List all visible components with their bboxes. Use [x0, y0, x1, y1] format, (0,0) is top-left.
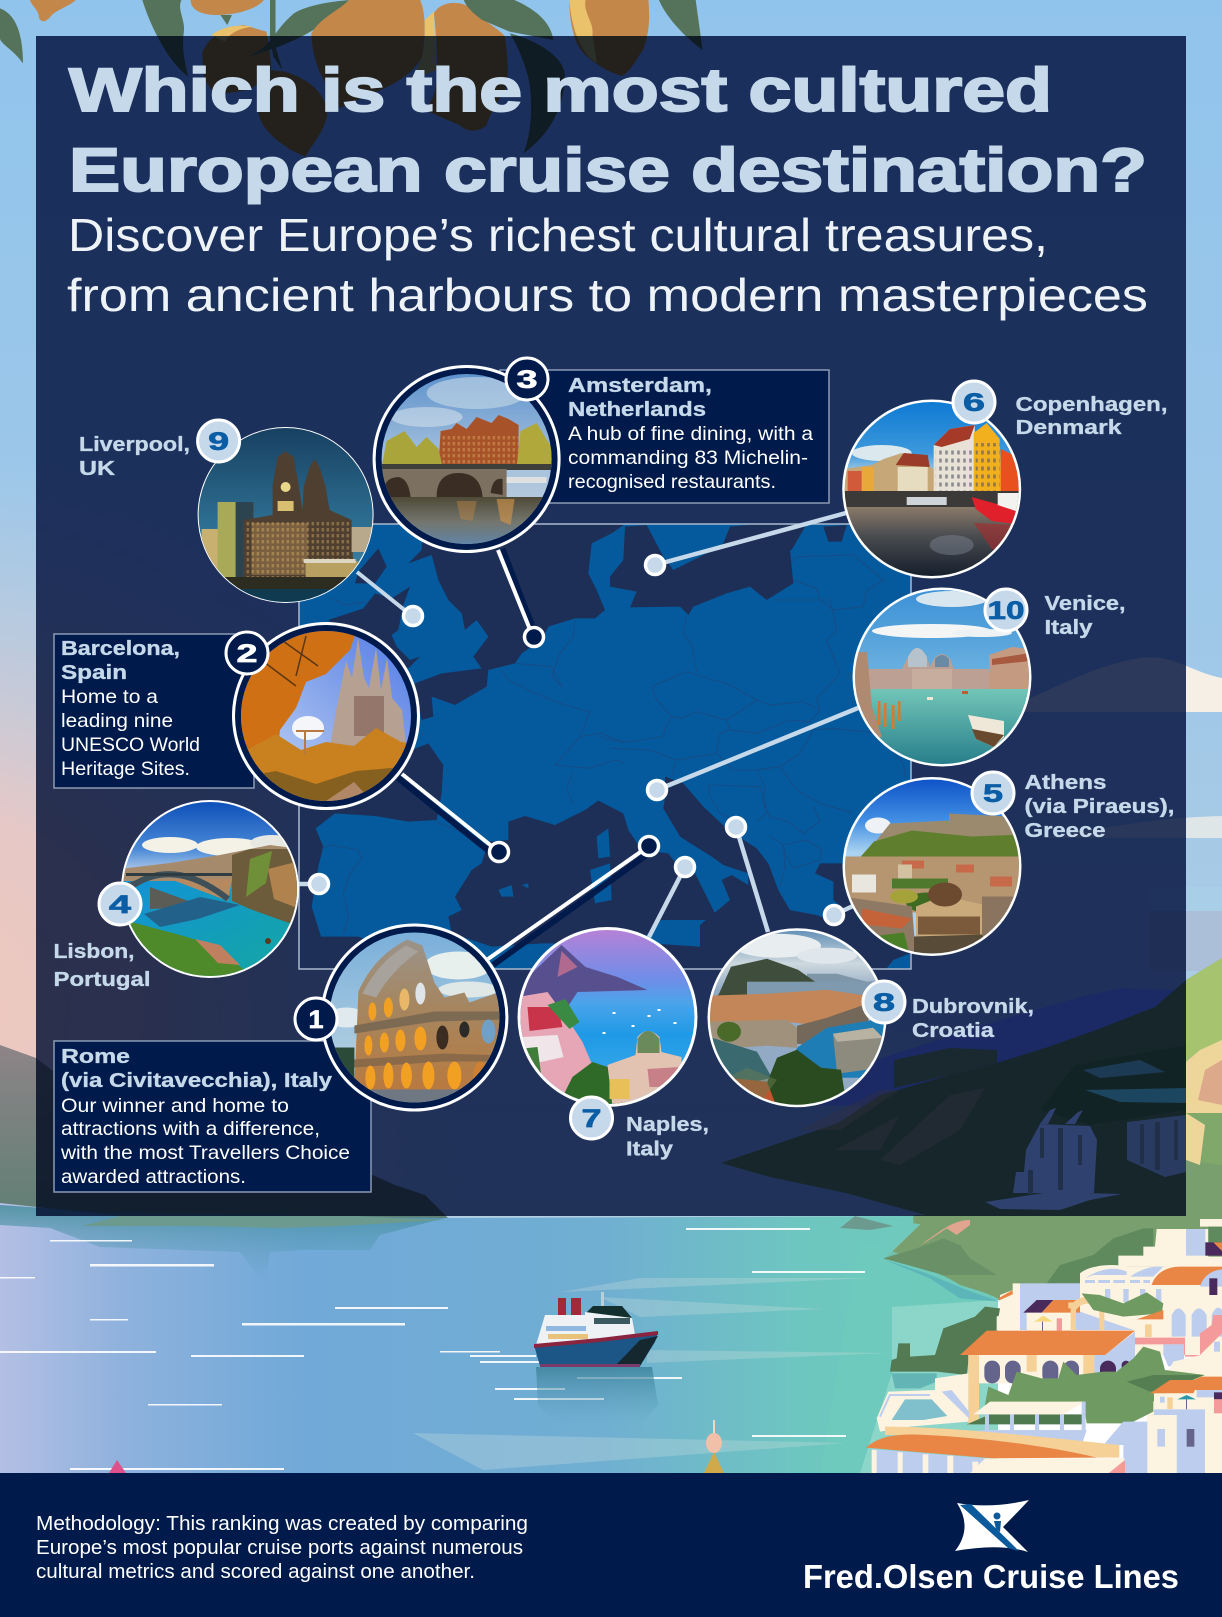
photo circle: Athens — [842, 776, 1022, 958]
title — [69, 56, 1147, 204]
connector: Venice — [657, 708, 858, 790]
badge 10: 10 — [988, 597, 1024, 625]
panel: dark translucent main panel — [36, 36, 1186, 1216]
connector: Copenhagen — [655, 513, 846, 565]
photo circle: Dubrovnik — [707, 928, 887, 1108]
callout: Rome: awarded attractions. — [61, 1166, 246, 1188]
badge 6 — [953, 381, 995, 423]
label: Dubrovnik: Dubrovnik, — [912, 996, 1034, 1018]
right green hillside — [721, 958, 1222, 1340]
label: Dubrovnik: Croatia — [912, 1020, 995, 1042]
label: Lisbon: Portugal — [54, 969, 150, 991]
label: Venice — [1044, 593, 1126, 639]
badge 5 — [972, 772, 1014, 814]
label: Naples: Naples, — [626, 1114, 709, 1136]
callout: Rome: attractions with a difference, — [61, 1118, 320, 1140]
connector: Athens — [834, 905, 855, 915]
connector: Lisbon — [295, 882, 319, 886]
callout: Amsterdam — [500, 370, 829, 503]
connector: Liverpool — [357, 572, 412, 616]
label: Dubrovnik — [912, 996, 1034, 1042]
water glints — [0, 1228, 865, 1470]
label: Liverpool: UK — [79, 458, 116, 480]
badge 4: 4 — [109, 891, 131, 919]
cruise ship — [534, 1292, 658, 1425]
label: Athens: Athens — [1024, 772, 1106, 794]
callout: Barcelona: Home to a — [61, 686, 158, 708]
callout: Barcelona: leading nine — [61, 710, 173, 732]
badge 6: 6 — [963, 389, 985, 417]
photo circle: Liverpool — [196, 425, 376, 609]
mountain reflection — [0, 1205, 445, 1285]
callout: Amsterdam: Amsterdam, — [568, 375, 712, 397]
callout: Barcelona: Barcelona, — [61, 638, 180, 660]
badge 9: 9 — [208, 428, 229, 456]
badge 10 — [985, 589, 1027, 631]
methodology text: Europe’s most popular cruise ports against numerous — [36, 1537, 523, 1559]
subtitle: from ancient harbours to modern masterpieces — [67, 269, 1148, 321]
hanging lemons and leaves — [0, 0, 703, 157]
label: Naples: Italy — [626, 1138, 674, 1160]
sea — [0, 1203, 998, 1473]
callout: Rome: with the most Travellers Choice — [60, 1142, 350, 1164]
methodology text — [36, 1513, 528, 1583]
badge 3: 3 — [516, 366, 538, 394]
map of Europe — [299, 524, 912, 969]
label: Copenhagen: Copenhagen, — [1016, 394, 1168, 416]
callout: Amsterdam: Netherlands — [568, 399, 706, 421]
label: Venice: Venice, — [1044, 593, 1126, 615]
photo circle: Amsterdam — [373, 365, 561, 553]
label: Copenhagen: Denmark — [1016, 417, 1123, 439]
label: Venice: Italy — [1044, 617, 1094, 639]
callout: Barcelona: Spain — [61, 662, 127, 684]
label: Athens: Greece — [1024, 820, 1106, 842]
left mountain — [0, 1045, 448, 1222]
callout: Rome — [54, 1041, 371, 1192]
callout: Barcelona: Heritage Sites. — [61, 758, 190, 780]
label: Athens — [1024, 772, 1174, 842]
badge 7 — [570, 1097, 612, 1139]
label: Lisbon: Lisbon, — [54, 941, 134, 963]
clouds on right margin — [990, 657, 1222, 971]
footer bar — [0, 1473, 1222, 1617]
methodology text: Methodology: This ranking was created by comparing — [36, 1513, 528, 1535]
callout: Barcelona: UNESCO World — [61, 734, 200, 756]
badge 3 — [506, 358, 548, 400]
connector: Dubrovnik — [736, 827, 768, 932]
subtitle: Discover Europe’s richest cultural treasures, — [68, 209, 1048, 261]
subtitle — [67, 209, 1148, 321]
hillside details seen through the panel — [800, 1060, 1186, 1210]
badge 1: 1 — [308, 1006, 324, 1034]
badge 8 — [863, 981, 905, 1023]
connector: Amsterdam — [498, 549, 537, 637]
coastal village — [866, 1215, 1222, 1475]
photo circle: Barcelona — [232, 622, 420, 810]
badge 4 — [99, 883, 141, 925]
title: Which is the most cultured — [69, 56, 1052, 124]
callout: Barcelona — [54, 634, 254, 788]
label: Lisbon — [54, 941, 150, 991]
photo circle: Venice — [852, 587, 1032, 769]
label: Liverpool — [79, 434, 190, 480]
sea light beams — [413, 1278, 888, 1470]
badge 8: 8 — [873, 989, 895, 1017]
label: Liverpool: Liverpool, — [79, 434, 190, 456]
callout: Rome: Rome — [61, 1046, 130, 1068]
badge 2: 2 — [236, 640, 258, 668]
logo wordmark: Fred.Olsen Cruise Lines — [803, 1558, 1179, 1595]
callout: Rome: (via Civitavecchia), Italy — [61, 1070, 333, 1092]
badge 2 — [226, 632, 268, 674]
map pins — [310, 556, 844, 924]
callout: Amsterdam: commanding 83 Michelin- — [568, 447, 808, 469]
callout: Rome: Our winner and home to — [61, 1095, 289, 1117]
distant blue hills — [790, 988, 1186, 1110]
title: European cruise destination? — [69, 136, 1147, 204]
label: Naples — [626, 1114, 709, 1160]
badge 7: 7 — [582, 1105, 602, 1133]
badge 5: 5 — [983, 780, 1003, 808]
methodology text: cultural metrics and scored against one another. — [36, 1561, 475, 1583]
badge 1 — [295, 998, 337, 1040]
right-margin rock face — [1186, 1040, 1222, 1217]
connector: Rome — [488, 846, 652, 965]
photo circle: Copenhagen — [842, 399, 1022, 579]
callout: Amsterdam: recognised restaurants. — [568, 471, 776, 493]
connector: Barcelona — [398, 774, 499, 856]
label: Athens: (via Piraeus), — [1024, 796, 1174, 818]
label: Copenhagen — [1016, 394, 1168, 439]
photo circle: Rome — [320, 924, 508, 1112]
logo: Fred. Olsen flag — [955, 1500, 1029, 1552]
callout: Amsterdam: A hub of fine dining, with a — [568, 423, 813, 445]
connector: Naples — [649, 867, 685, 937]
photo circle: Naples — [518, 927, 698, 1107]
photo circle: Lisbon — [120, 799, 300, 981]
marker post and pink tip — [109, 1420, 724, 1473]
badge 9 — [198, 420, 240, 462]
